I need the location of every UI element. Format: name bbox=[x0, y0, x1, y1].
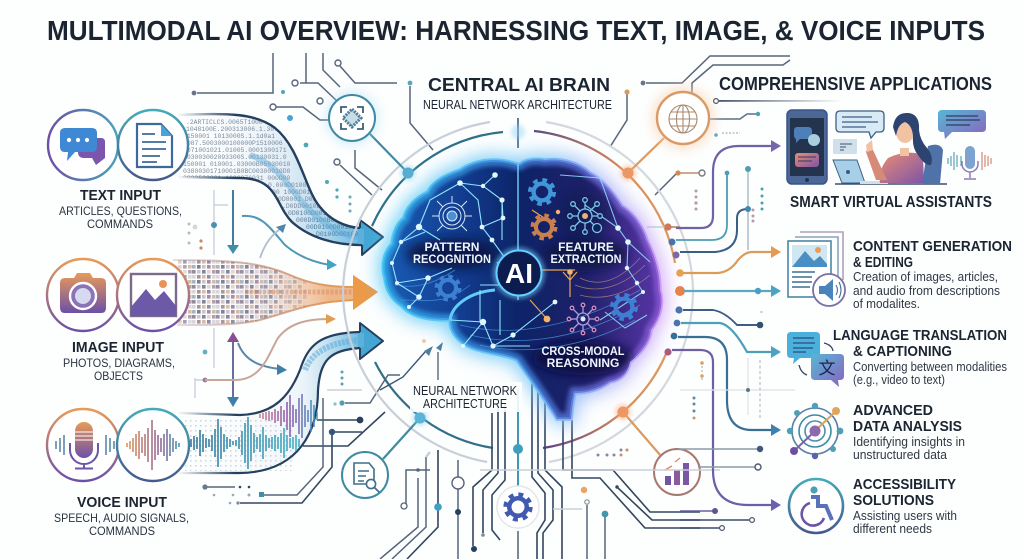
text input ribbon arrow bbox=[177, 114, 383, 255]
label: OBJECTS bbox=[94, 369, 143, 383]
text input ribbon arrow: 0D0100D0010BD00D bbox=[288, 210, 350, 217]
icon: microphone circle bbox=[47, 409, 119, 481]
text: SOLUTIONS bbox=[853, 492, 934, 509]
label bbox=[59, 187, 182, 231]
heading: central AI brain: CENTRAL AI BRAIN bbox=[428, 75, 610, 95]
text input ribbon arrow: 0071001021.01005.0001300171 bbox=[183, 147, 287, 154]
text bbox=[853, 238, 1012, 311]
icon: translation bubbles: 文 bbox=[818, 359, 836, 378]
text input ribbon arrow: 000D0100B0D0100D bbox=[296, 217, 358, 224]
illustration: smart virtual assistant bbox=[787, 110, 991, 184]
text: & CAPTIONING bbox=[853, 343, 952, 360]
text input ribbon arrow: 0.000D0100B0D bbox=[268, 182, 318, 189]
title: MULTIMODAL AI OVERVIEW: HARNESSING TEXT, IMAGE, & VOICE INPUTS bbox=[47, 15, 985, 46]
brain network lines bbox=[390, 172, 650, 349]
central gear bbox=[497, 390, 539, 559]
brain concentric arcs bbox=[343, 118, 693, 462]
voice input ribbon arrow bbox=[177, 323, 383, 473]
arrow to data analysis bbox=[678, 337, 781, 436]
text: Creation of images, articles, bbox=[853, 270, 998, 284]
text input ribbon arrow: 150001 010001.03000B05030010 bbox=[183, 161, 291, 168]
text: DATA ANALYSIS bbox=[853, 418, 962, 435]
text input ribbon arrow: D0100D0010BD0 bbox=[316, 231, 366, 238]
arrow to content generation bbox=[683, 246, 781, 273]
heading: comprehensive applications bbox=[714, 74, 992, 103]
icon: globe circle bbox=[620, 86, 715, 181]
panel: text input bbox=[48, 110, 188, 231]
image input ribbon arrow bbox=[173, 258, 378, 328]
icon: document circle bbox=[118, 110, 188, 180]
icon: radial data network bbox=[787, 403, 843, 459]
icon: waveform circle bbox=[117, 409, 189, 481]
application: accessibility bbox=[789, 476, 957, 536]
arrow to content generation 2 bbox=[684, 285, 781, 297]
brain labels: REASONING bbox=[547, 356, 619, 370]
text input ribbon arrow: 1048100E.200313006.1.3070 bbox=[186, 126, 282, 133]
brain labels: EXTRACTION bbox=[550, 252, 622, 266]
text input ribbon arrow: .D0DD0010B0D0 bbox=[282, 203, 332, 210]
brain icon: pattern rings bbox=[432, 196, 472, 231]
person bbox=[866, 113, 943, 184]
arrow to accessibility bbox=[672, 350, 781, 511]
brain labels: PATTERN bbox=[425, 240, 479, 254]
label: IMAGE INPUT bbox=[72, 339, 164, 356]
icon: image stack with speaker bbox=[788, 232, 845, 306]
heading: comprehensive applications: COMPREHENSIVE APPLICATIONS bbox=[719, 74, 992, 94]
heading: central AI brain: NEURAL NETWORK ARCHITECTURE bbox=[423, 97, 612, 112]
arrow to virtual assistants bbox=[676, 140, 781, 228]
text input ribbon arrow: 00D0100D0010B0D bbox=[306, 224, 364, 231]
panel: voice input bbox=[47, 409, 189, 538]
icon: picture circle bbox=[117, 259, 189, 331]
label: VOICE INPUT bbox=[77, 494, 167, 511]
code card bbox=[833, 139, 857, 154]
laptop bbox=[833, 160, 947, 184]
speech bubble bbox=[836, 111, 884, 138]
brain bbox=[383, 159, 662, 419]
arrow to neural label bbox=[380, 339, 443, 390]
arrow to translation bbox=[681, 323, 781, 358]
icon: wheelchair bbox=[789, 479, 843, 533]
text: & EDITING bbox=[853, 254, 913, 271]
application: language translation bbox=[787, 327, 1007, 387]
text input ribbon arrow: 03800301710001B0BC00300010D0 bbox=[183, 168, 291, 175]
text: (e.g., video to text) bbox=[853, 373, 945, 387]
text: smart virtual assistants: SMART VIRTUAL ASSISTANTS bbox=[790, 194, 992, 211]
output arrows bbox=[672, 140, 795, 530]
text input ribbon arrow: .2ARTICLCS.0065T1000 1.8E001 bbox=[186, 119, 294, 126]
application: data analysis bbox=[787, 402, 965, 462]
text: ADVANCED bbox=[853, 402, 933, 419]
text input ribbon arrow: 1087.5003000100000P1510006 bbox=[183, 140, 283, 147]
brain labels: FEATURE bbox=[558, 240, 614, 254]
purple speech bubble bbox=[938, 110, 986, 139]
text input ribbon arrow: 00 1000D0100B bbox=[272, 189, 322, 196]
icon: camera circle bbox=[47, 259, 119, 331]
AI core: AI bbox=[505, 258, 533, 289]
label: TEXT INPUT bbox=[80, 187, 161, 204]
text: ACCESSIBILITY bbox=[853, 476, 956, 493]
microphone bbox=[948, 146, 991, 179]
icon: bar chart circle bbox=[615, 404, 700, 495]
text bbox=[833, 327, 1007, 387]
text: Assisting users with bbox=[853, 509, 957, 523]
icon: scan chip circle bbox=[325, 91, 416, 181]
icon: document search circle bbox=[342, 410, 428, 498]
text bbox=[853, 402, 965, 462]
icon: chat bubbles circle bbox=[48, 110, 118, 180]
background circuit traces bbox=[188, 53, 790, 505]
text input ribbon arrow: 1150001 1013000S.1.1d0a1 bbox=[183, 133, 275, 140]
text: of modalites. bbox=[853, 297, 920, 311]
heading: central AI brain bbox=[423, 75, 612, 112]
text input ribbon arrow: 0D0001 D00100 bbox=[278, 196, 328, 203]
connector arrows between input streams bbox=[205, 190, 337, 407]
text bbox=[853, 476, 957, 536]
text: unstructured data bbox=[853, 448, 947, 462]
application: content generation bbox=[788, 232, 1012, 311]
phone bbox=[787, 110, 827, 184]
output connector nodes bbox=[664, 223, 685, 356]
label: SPEECH, AUDIO SIGNALS, bbox=[54, 511, 189, 525]
icon: translation bubbles bbox=[787, 332, 844, 387]
label bbox=[54, 494, 189, 538]
brain gears bbox=[437, 181, 635, 318]
text: and audio from descriptions bbox=[853, 284, 1000, 298]
text: neural network architecture bbox=[410, 382, 522, 412]
brain node stars bbox=[567, 198, 602, 335]
label: COMMANDS bbox=[87, 217, 153, 231]
label: PHOTOS, DIAGRAMS, bbox=[63, 356, 175, 370]
bottom circuit traces bbox=[380, 227, 720, 559]
panel: image input bbox=[47, 259, 189, 383]
text: neural network architecture: ARCHITECTURE bbox=[423, 396, 507, 411]
text: Identifying insights in bbox=[853, 435, 965, 449]
label bbox=[63, 339, 175, 383]
brain labels: CROSS-MODAL bbox=[542, 344, 624, 358]
AI core bbox=[493, 247, 545, 299]
text: different needs bbox=[853, 522, 932, 536]
text input ribbon arrow: 3823503001 1603376031 000D00 bbox=[183, 175, 291, 182]
text: CONTENT GENERATION bbox=[853, 238, 1012, 255]
brain labels: RECOGNITION bbox=[413, 252, 491, 266]
label: ARTICLES, QUESTIONS, bbox=[59, 204, 182, 218]
text: LANGUAGE TRANSLATION bbox=[833, 327, 1007, 344]
text: Converting between modalities bbox=[853, 360, 1007, 374]
brain labels bbox=[413, 240, 624, 370]
label: COMMANDS bbox=[89, 524, 155, 538]
text: neural network architecture: NEURAL NETWORK bbox=[413, 383, 517, 398]
text input ribbon arrow: 103003002093300S.00130031.0 bbox=[183, 154, 287, 161]
